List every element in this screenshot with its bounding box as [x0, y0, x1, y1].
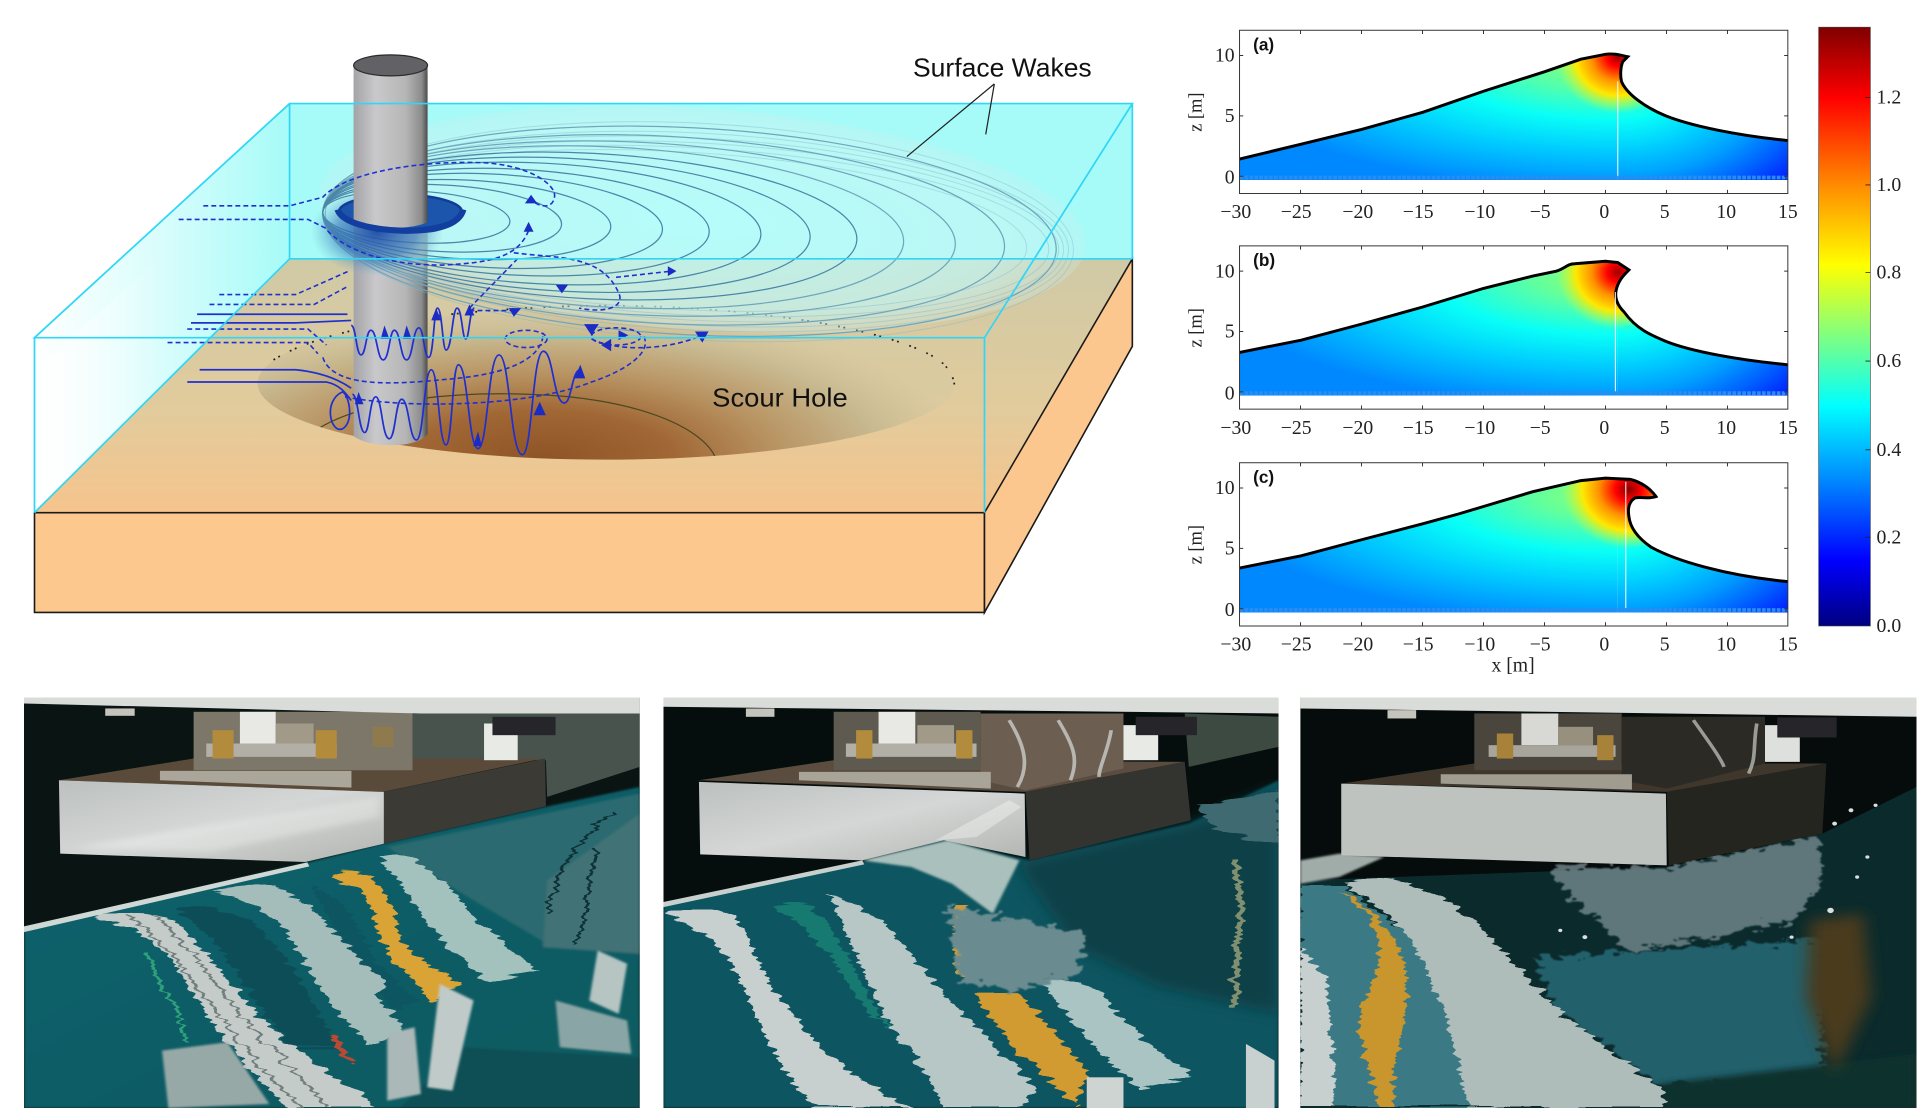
- tick labels b: z [m]: [1185, 308, 1205, 348]
- chart (c): wave velocity field: [1185, 463, 1798, 656]
- tick labels c: 5: [1660, 634, 1670, 656]
- colour bar labels: [1877, 87, 1901, 637]
- tick labels c: 10: [1716, 634, 1736, 656]
- tick labels b: 10: [1716, 417, 1736, 439]
- colour bar labels: 0.8: [1877, 262, 1901, 284]
- wave surface line b: [1240, 261, 1788, 365]
- crest streak p2: [663, 860, 864, 907]
- colour bar labels: 0.4: [1877, 439, 1901, 461]
- colour bar labels: 0.6: [1877, 350, 1901, 372]
- reflected bands p2: [663, 790, 1279, 1108]
- axes frame a: [1240, 30, 1788, 194]
- tick labels a: −20: [1342, 201, 1373, 223]
- flow streamlines: [168, 162, 708, 455]
- tick labels c: −30: [1220, 634, 1251, 656]
- central splash p2: [948, 907, 1087, 991]
- tick labels b: 10: [1215, 260, 1235, 282]
- crest streak p1: [24, 862, 309, 932]
- tick labels a: [1185, 45, 1798, 223]
- tick labels b: −25: [1281, 417, 1312, 439]
- rail and clamp p2: [663, 697, 1279, 760]
- label: Scour Hole: Scour Hole: [712, 385, 848, 413]
- tick labels b: −30: [1220, 417, 1251, 439]
- label: Surface Wakes: Surface Wakes: [913, 54, 1092, 82]
- tick labels c: −20: [1342, 634, 1373, 656]
- water volume edges: [34, 104, 1132, 513]
- tick labels c: 10: [1215, 477, 1235, 499]
- falling splash p3: [1552, 837, 1822, 950]
- bands p3: [1300, 878, 1666, 1108]
- plate block p1: [59, 759, 546, 862]
- water base p2: [663, 780, 1279, 1108]
- chart (a): wave velocity field: [1185, 30, 1798, 223]
- instrument frame p1: [160, 712, 412, 788]
- tick labels b: 0: [1599, 417, 1609, 439]
- wave surface line c: [1240, 478, 1788, 582]
- dark upper right water p2: [1017, 787, 1279, 1014]
- rail and clamp p1: [24, 697, 640, 760]
- tick labels c: 0: [1599, 634, 1609, 656]
- brown reflection p3: [1806, 914, 1871, 1074]
- panel tag a: (a): [1253, 35, 1274, 55]
- tick labels a: −25: [1281, 201, 1312, 223]
- tick labels a: −5: [1530, 201, 1551, 223]
- tick labels a: −10: [1464, 201, 1495, 223]
- axes frame b: [1240, 246, 1788, 409]
- tick labels b: −20: [1342, 417, 1373, 439]
- tick labels a: −30: [1220, 201, 1251, 223]
- tick labels a: −15: [1403, 201, 1434, 223]
- monopile column lower part: [354, 74, 428, 445]
- tick labels a: z [m]: [1185, 92, 1205, 132]
- sand bed top surface: [34, 259, 1132, 513]
- foam p3: [1300, 854, 1384, 884]
- tick labels a: 10: [1716, 201, 1736, 223]
- tick labels c: −10: [1464, 634, 1495, 656]
- tick labels c: 15: [1778, 634, 1798, 656]
- x axis title: x [m]: [1491, 655, 1535, 677]
- tick labels b: 5: [1225, 321, 1235, 343]
- overturning sheet p2: [862, 840, 1019, 914]
- sand block front and right faces: [34, 259, 1132, 612]
- tick labels c: [1185, 477, 1798, 656]
- tick labels c: 5: [1225, 538, 1235, 560]
- tick labels a: 0: [1225, 167, 1235, 189]
- instrument frame p2: [799, 712, 1123, 790]
- colour bar labels: 0.2: [1877, 526, 1901, 548]
- tick labels b: 5: [1660, 417, 1670, 439]
- tick labels b: 15: [1778, 417, 1798, 439]
- tick labels c: z [m]: [1185, 525, 1205, 564]
- reflected bands p1: [93, 810, 615, 1108]
- tick labels a: 15: [1778, 201, 1798, 223]
- water base p3: [1300, 787, 1916, 1108]
- tick labels c: 0: [1225, 599, 1235, 621]
- dense wake core behind column: [339, 195, 462, 229]
- tick labels b: −10: [1464, 417, 1495, 439]
- fixtures p1: [162, 950, 631, 1108]
- tick labels a: 5: [1660, 201, 1670, 223]
- tick labels b: −5: [1530, 417, 1551, 439]
- teal reflection p3: [1536, 940, 1822, 1084]
- velocity field b: [1240, 253, 1790, 398]
- tick labels b: [1185, 260, 1798, 439]
- plate block p3: [1341, 764, 1826, 865]
- water base p1: [24, 787, 640, 1108]
- axes frame c: [1240, 463, 1788, 626]
- chart (b): wave velocity field: [1185, 246, 1798, 439]
- label: Surface Wakes: [907, 54, 1092, 157]
- velocity field a: [1240, 55, 1788, 180]
- tick labels c: −5: [1530, 634, 1551, 656]
- panel tag c: (c): [1253, 467, 1274, 487]
- photo 3: wave overtopping plate: [1300, 697, 1916, 1108]
- surface wake ellipse with ring lines: [310, 82, 1094, 360]
- fixtures p2: [1087, 1044, 1275, 1108]
- panel: 3D scour diagram: [34, 54, 1132, 612]
- tick labels a: 10: [1215, 45, 1235, 67]
- velocity field c: [1240, 470, 1790, 615]
- monopile column top part: [354, 55, 428, 234]
- tick labels a: 5: [1225, 105, 1235, 127]
- wake core front arc: [338, 210, 463, 231]
- panel tag b: (b): [1253, 250, 1275, 270]
- dark tank floor p3: [1658, 1059, 1911, 1104]
- plate block p2: [699, 760, 1191, 860]
- tick labels b: 0: [1225, 382, 1235, 404]
- colour bar labels: 0.0: [1877, 615, 1901, 637]
- tick labels c: −25: [1281, 634, 1312, 656]
- instrument frame p3: [1441, 713, 1765, 790]
- rail and clamp p3: [1300, 697, 1916, 762]
- photo 1: wave approaching plate: [24, 697, 640, 1108]
- tick labels a: 0: [1599, 201, 1609, 223]
- colour bar: [1819, 27, 1901, 637]
- water volume back and side faces: [34, 104, 1132, 513]
- wave surface line a: [1240, 54, 1788, 159]
- droplets p3: [1558, 792, 1878, 939]
- tick labels b: −15: [1403, 417, 1434, 439]
- scour hole: [258, 306, 955, 460]
- colour bar labels: 1.0: [1877, 174, 1901, 196]
- photo 2: wave hitting plate: [663, 697, 1279, 1108]
- colour bar labels: 1.2: [1877, 87, 1901, 109]
- tick labels c: −15: [1403, 634, 1434, 656]
